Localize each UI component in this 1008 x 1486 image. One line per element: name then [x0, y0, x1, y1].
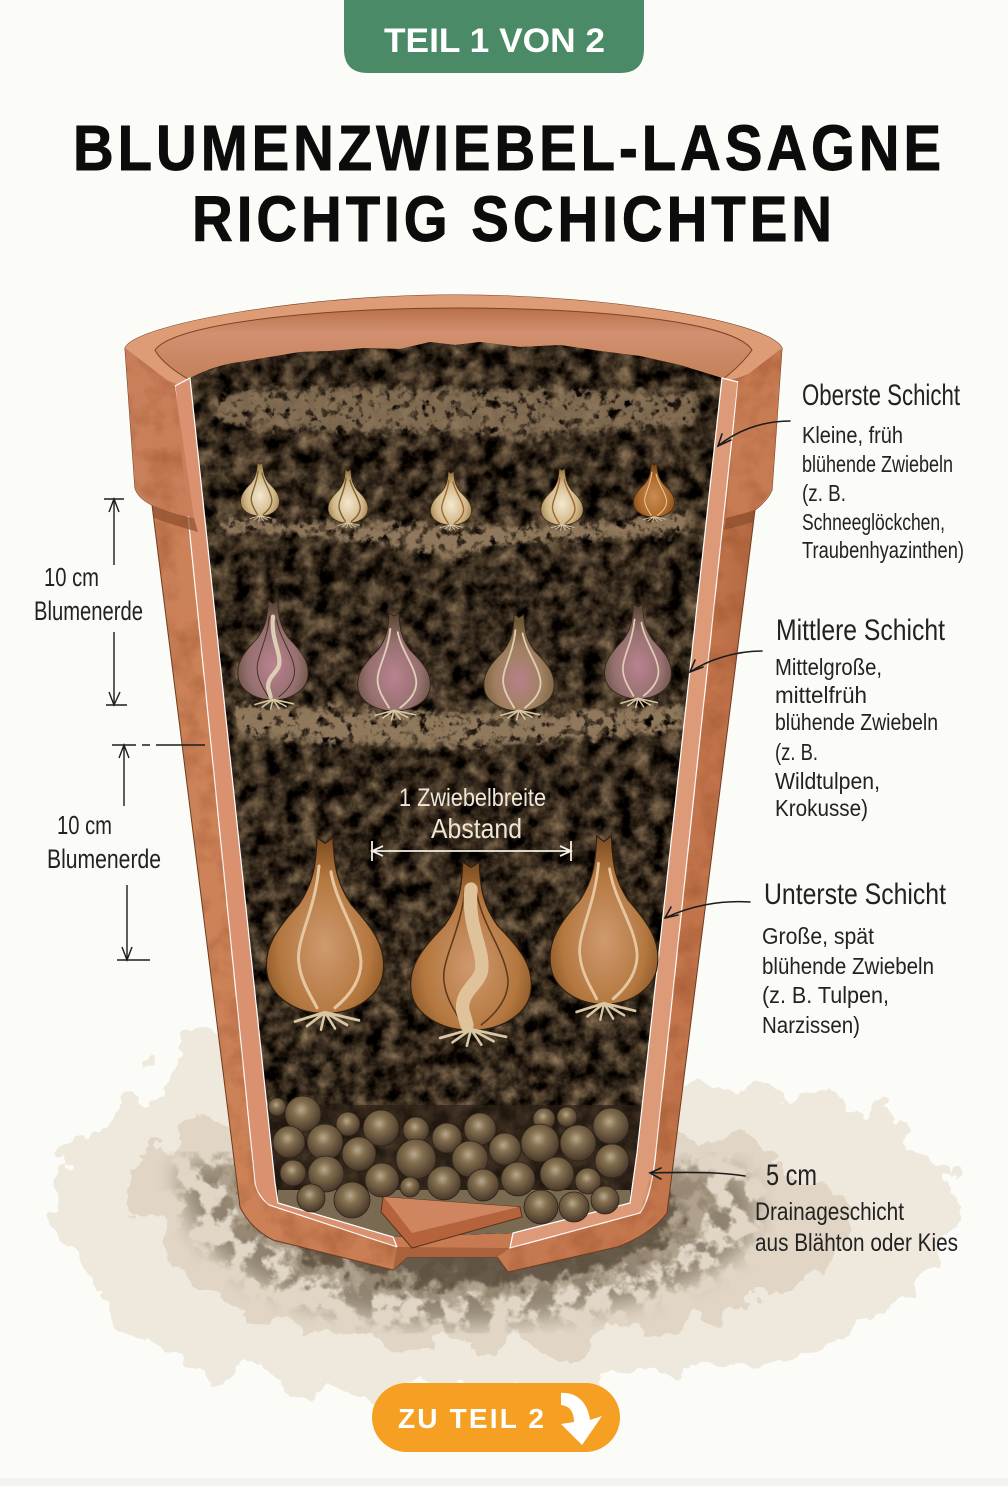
callout: bottom layer: Große, spät [762, 923, 875, 949]
callout: top layer [802, 379, 964, 563]
callout: top layer: Schneeglöckchen, [802, 509, 945, 535]
bulb [411, 862, 531, 1046]
leader arrows [650, 421, 790, 1179]
title [73, 112, 945, 255]
callout: bottom layer: (z. B. Tulpen, [762, 982, 889, 1008]
large bulbs: bottom layer [266, 836, 658, 1046]
callout: top layer: Traubenhyazinthen) [802, 537, 964, 563]
label: 10 cm Blumenerde upper [34, 562, 143, 626]
bulb [358, 613, 430, 720]
title: RICHTIG SCHICHTEN [192, 183, 836, 255]
bulb [328, 470, 368, 528]
bulb [266, 838, 384, 1030]
bulb [550, 836, 658, 1020]
callout: drainage: aus Blähton oder Kies [755, 1229, 958, 1257]
right cut face [510, 378, 738, 1248]
left cut face [175, 378, 397, 1247]
callout: bottom layer: blühende Zwiebeln [762, 953, 934, 979]
bulb [430, 472, 472, 530]
dimension: lower 10 cm [112, 745, 205, 960]
callout: middle layer: Mittlere Schicht [776, 614, 946, 647]
dimension: upper 10 cm [104, 499, 127, 705]
top badge: TEIL 1 VON 2 [384, 22, 605, 60]
callout: drainage: 5 cm [766, 1159, 817, 1192]
soil stain on the ground [54, 1035, 959, 1390]
expanded clay drainage balls [268, 1096, 629, 1224]
bulb [541, 468, 583, 530]
bottom button [372, 1383, 620, 1452]
pot rim top surface [125, 295, 782, 385]
callout: top layer: blühende Zwiebeln [802, 451, 953, 477]
right rim outer section [726, 348, 782, 518]
callout: middle layer: Krokusse) [775, 795, 868, 821]
bulb [484, 614, 554, 720]
callout: drainage [755, 1159, 958, 1257]
pot outer shell [125, 295, 782, 1272]
bulb [633, 464, 675, 522]
bottom notch dark [393, 1247, 510, 1270]
callout: top layer: Kleine, früh [802, 422, 903, 448]
callout: middle layer: blühende Zwiebeln [775, 709, 938, 735]
soil mottling and layers [180, 335, 730, 1245]
callout: bottom layer [762, 878, 947, 1038]
callout: bottom layer: Narzissen) [762, 1012, 860, 1038]
terracotta pot cross-section [120, 295, 790, 1280]
spacing label and arrow in soil: Abstand [431, 813, 522, 844]
label: 10 cm Blumenerde upper: 10 cm [44, 562, 99, 592]
callout: middle layer [775, 614, 946, 821]
callout: drainage: Drainageschicht [755, 1198, 904, 1226]
bulb [605, 604, 671, 708]
broken pot shard [381, 1197, 522, 1248]
callout: middle layer: (z. B. [775, 739, 818, 765]
dark drainage bed [262, 1105, 642, 1235]
label: 10 cm Blumenerde upper: Blumenerde [34, 596, 143, 626]
medium bulbs: middle layer [238, 600, 671, 720]
callout: middle layer: Wildtulpen, [775, 768, 880, 794]
light soil band top [215, 388, 700, 438]
label: 10 cm Blumenerde lower: Blumenerde [47, 844, 161, 874]
top badge [344, 0, 644, 73]
label: 10 cm Blumenerde lower [47, 810, 161, 874]
bottom button: ZU TEIL 2 [398, 1403, 544, 1434]
potting soil [190, 342, 722, 1237]
callout: bottom layer: Unterste Schicht [764, 878, 947, 911]
label: 10 cm Blumenerde lower: 10 cm [57, 810, 112, 840]
light soil band 2 [232, 702, 685, 747]
bulb [241, 462, 279, 521]
left rim outer section [125, 348, 194, 518]
icon: curved arrow down [561, 1393, 602, 1445]
pot inner back wall [155, 308, 752, 380]
rim underside shadow [152, 505, 755, 532]
pot texture [120, 340, 790, 1280]
light soil band 1 [215, 510, 692, 557]
callout: top layer: (z. B. [802, 480, 846, 506]
small bulbs: top layer [241, 462, 675, 530]
spacing label and arrow in soil [372, 784, 571, 861]
spacing label and arrow in soil: 1 Zwiebelbreite [399, 784, 546, 812]
callout: middle layer: mittelfrüh [775, 682, 867, 708]
callout: middle layer: Mittelgroße, [775, 654, 882, 680]
bottom edge strip [0, 1478, 1008, 1486]
bulb [238, 600, 308, 709]
